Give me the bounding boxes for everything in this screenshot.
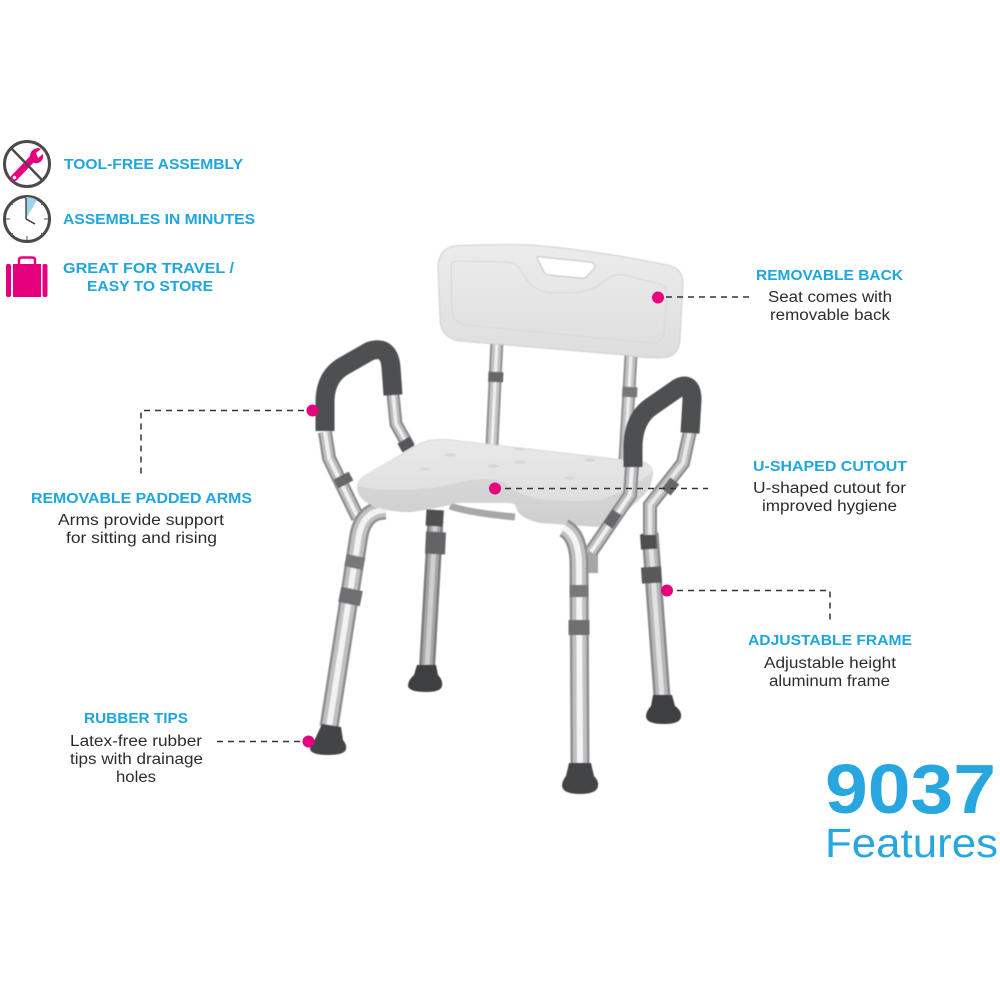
heading: tool-free assembly: TOOL-FREE ASSEMBLY [64, 156, 243, 173]
heading: assembles in minutes: ASSEMBLES IN MINUTES [63, 211, 255, 228]
callout: rubber tips: Latex-free rubber [70, 733, 202, 750]
icon: suitcase [6, 258, 48, 297]
heading: great for travel [63, 260, 235, 295]
chair illustration [310, 245, 692, 794]
left arm pipes [325, 394, 412, 518]
back posts [492, 340, 631, 460]
callout: rubber tips: holes [116, 769, 156, 786]
heading: great for travel: GREAT FOR TRAVEL / [63, 260, 235, 277]
callout: rubber tips [70, 710, 314, 786]
callout: U-shaped cutout: U-SHAPED CUTOUT [753, 458, 907, 475]
callout: adjustable frame: Adjustable height [764, 655, 897, 672]
front right foot [562, 763, 598, 794]
front right leg [564, 528, 593, 765]
callout: removable back: removable back [770, 307, 890, 324]
right armrest pad [633, 386, 692, 467]
callout: rubber tips: tips with drainage [70, 751, 203, 768]
callout: adjustable frame [661, 584, 912, 690]
callout: removable padded arms: REMOVABLE PADDED ARMS [31, 490, 252, 507]
callout: U-shaped cutout: improved hygiene [762, 498, 897, 515]
backrest [438, 245, 683, 358]
callout: U-shaped cutout: U-shaped cutout for [753, 480, 906, 497]
front left foot [310, 724, 346, 755]
right arm pipes [591, 431, 690, 552]
under-seat bar [450, 506, 515, 517]
callout: U-shaped cutout [489, 458, 907, 515]
title: 9037 Features: 9037 [825, 750, 996, 828]
callout: removable padded arms: Arms provide support [58, 512, 225, 529]
left armrest pad [325, 350, 393, 431]
callout: removable back [652, 267, 903, 324]
icon: no tools wrench [4, 142, 50, 186]
seat [357, 439, 653, 527]
callout: removable back: REMOVABLE BACK [756, 267, 903, 284]
callout: removable back: Seat comes with [768, 289, 892, 306]
callout: rubber tips: RUBBER TIPS [84, 710, 188, 727]
back feet [408, 665, 681, 724]
callout: removable padded arms [31, 404, 318, 547]
heading: great for travel: EASY TO STORE [87, 278, 213, 295]
callout: removable padded arms: for sitting and rising [66, 530, 217, 547]
title: 9037 Features: Features [825, 820, 998, 866]
callout: adjustable frame: ADJUSTABLE FRAME [748, 632, 912, 649]
back legs [427, 510, 662, 697]
icon: clock [4, 196, 50, 242]
callout: adjustable frame: aluminum frame [769, 673, 890, 690]
front left leg [329, 510, 386, 727]
title: 9037 Features [825, 750, 998, 866]
